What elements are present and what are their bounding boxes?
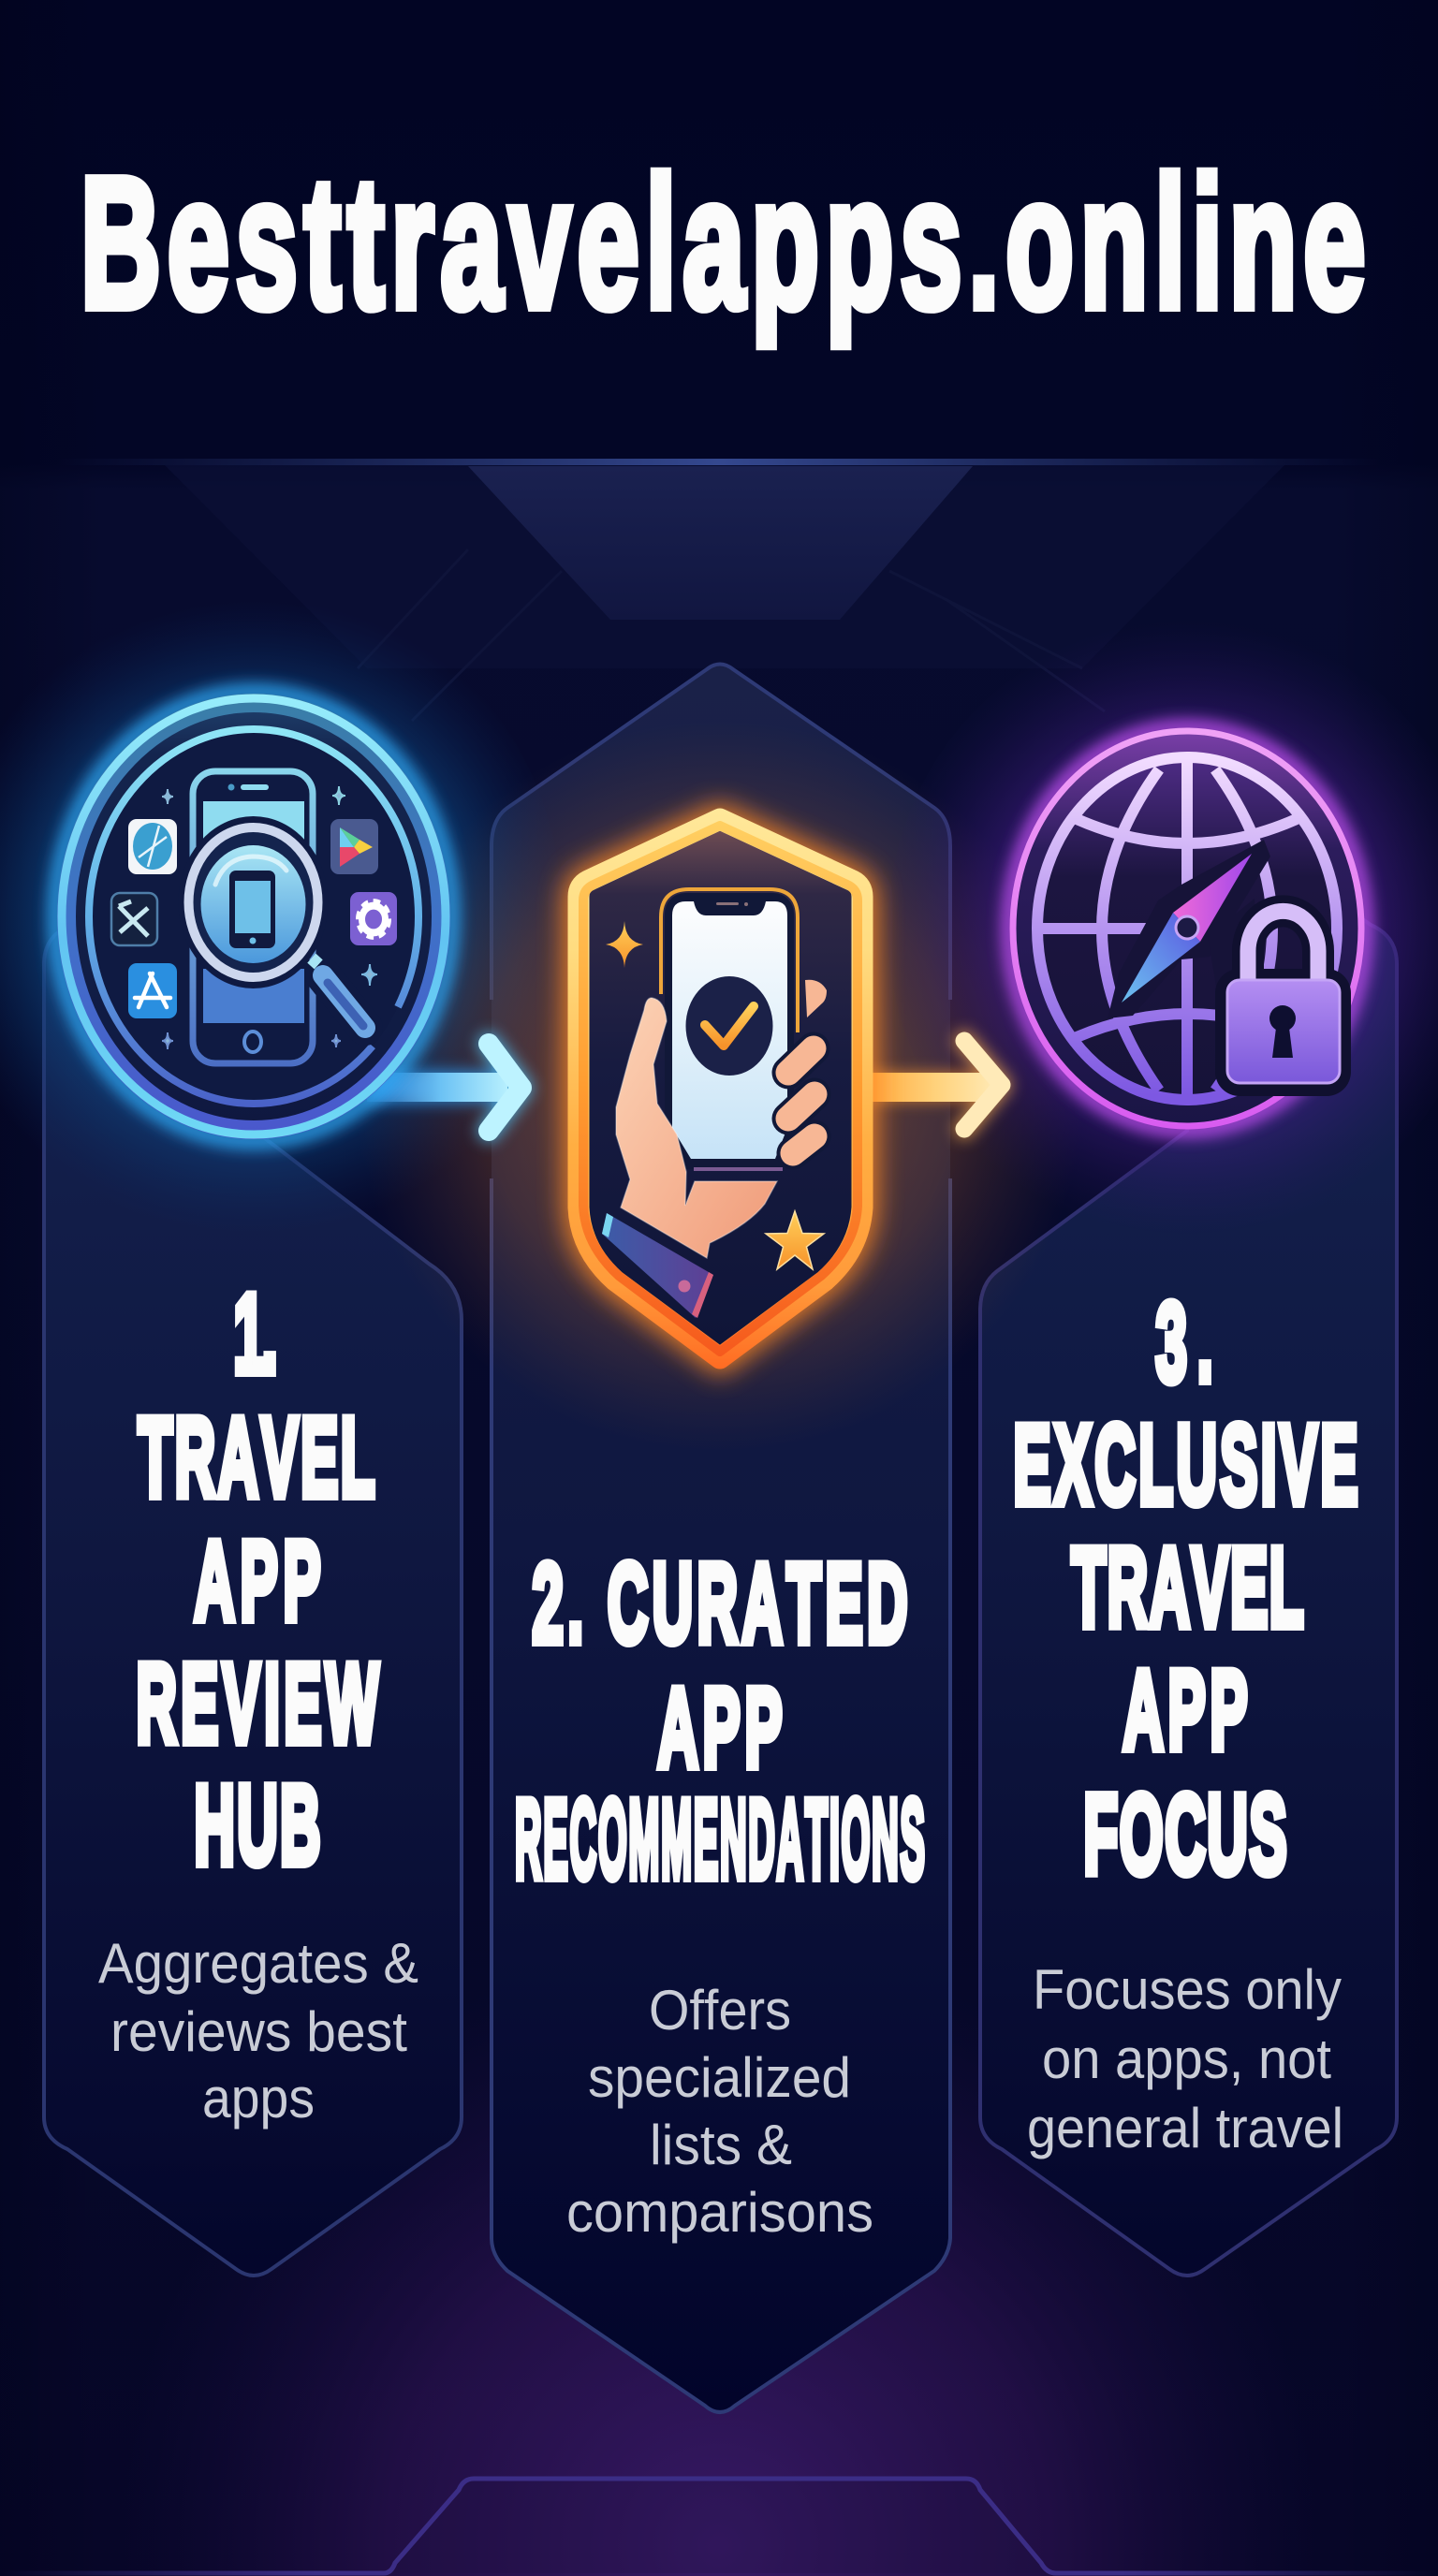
text: step 2 description [566, 1979, 873, 2244]
heading: step 1 [137, 1271, 379, 1889]
panel: step 3 card [980, 796, 1397, 2276]
icon: app review magnifier badge [55, 692, 452, 1141]
hand [616, 998, 777, 1258]
icon: globe with compass and padlock [1009, 727, 1365, 1130]
bottom trapezoid outline [0, 2479, 1438, 2573]
app icon: compass [128, 819, 177, 874]
heading: step 1: TRAVEL [139, 1395, 374, 1521]
fingers [788, 980, 827, 1153]
text: step 3 description: on apps, not [1042, 2027, 1331, 2090]
phone in hand [661, 889, 798, 1171]
text: step 3 description [1027, 1958, 1343, 2159]
heading: step 3: TRAVEL [1071, 1525, 1303, 1651]
heading: step 1: REVIEW [137, 1641, 379, 1767]
title: Besttravelapps.online [81, 138, 1366, 346]
text: step 2 description: Offers [649, 1979, 791, 2042]
padlock [1215, 911, 1351, 1096]
text: step 1 description [98, 1932, 418, 2130]
shirt cuff [602, 1213, 713, 1318]
arrow: step 1 to step 2 [367, 1044, 521, 1131]
heading: step 1: 1. [234, 1271, 278, 1398]
panel: step 1 card [44, 796, 462, 2276]
arrow: step 2 to step 3 [863, 1041, 1002, 1129]
magnifying glass [178, 816, 365, 1028]
icon: star [766, 1211, 824, 1269]
app icon: play store [330, 819, 378, 874]
text: step 1 description: Aggregates & [98, 1932, 418, 1995]
app icon: app store [128, 963, 177, 1018]
text: step 2 description: lists & [650, 2114, 792, 2176]
heading: step 1: HUB [195, 1763, 320, 1889]
heading: step 3: 3. [1155, 1280, 1212, 1406]
heading: step 2: 2. CURATED [532, 1541, 907, 1667]
globe grid [1037, 757, 1337, 1100]
heading: step 3: FOCUS [1084, 1772, 1286, 1898]
text: step 3 description: Focuses only [1033, 1958, 1342, 2021]
compass needle [1122, 854, 1252, 1003]
text: step 2 description: comparisons [566, 2181, 873, 2244]
text: step 2 description: specialized [588, 2046, 851, 2109]
text: step 1 description: apps [202, 2067, 315, 2130]
sparkles [162, 786, 377, 1049]
heading: step 2: RECOMMENDATIONS [515, 1776, 925, 1902]
heading: step 2 [515, 1541, 925, 1902]
heading: step 1: APP [195, 1518, 320, 1645]
icon: shield with hand holding phone [579, 819, 862, 1358]
text: step 3 description: general travel [1027, 2097, 1343, 2159]
phone behind magnifier [193, 771, 313, 1063]
heading: step 2: APP [657, 1665, 783, 1792]
text: step 1 description: reviews best [110, 2000, 407, 2063]
panel: step 2 card [492, 665, 950, 2412]
app icon: gear [350, 892, 397, 945]
heading: step 3: APP [1123, 1647, 1248, 1774]
glow: icons [0, 590, 1438, 1479]
heading: step 3: EXCLUSIVE [1013, 1402, 1357, 1529]
heading: step 3 [1013, 1280, 1357, 1898]
icon: sparkle [606, 921, 643, 968]
app icon: tools [111, 893, 157, 945]
